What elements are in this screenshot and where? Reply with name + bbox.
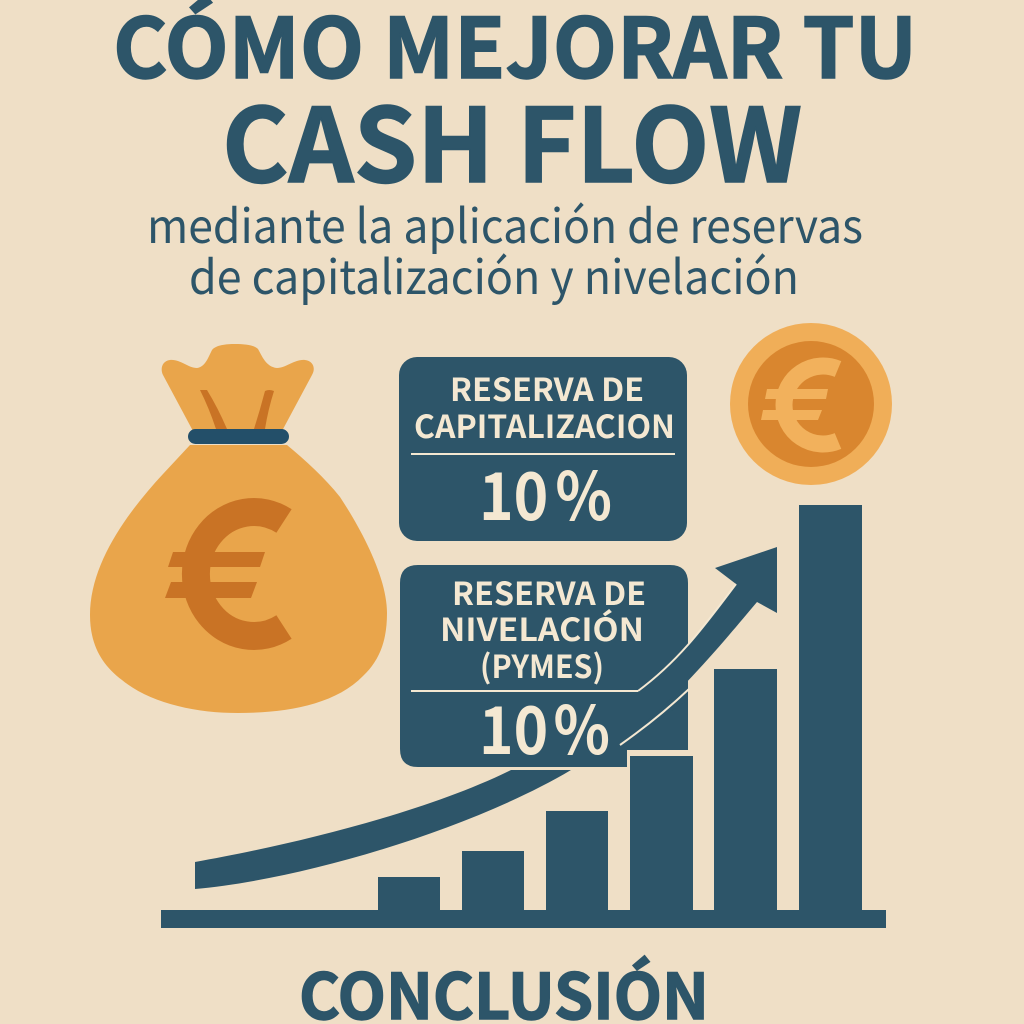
panel: reserva de capitalización: 10% (479, 444, 612, 540)
subtitle (147, 188, 863, 308)
panel: reserva de capitalización: RESERVA DE (450, 365, 644, 411)
subtitle: mediante la aplicación de reservas (147, 188, 863, 257)
subtitle: de capitalización y nivelación (189, 239, 799, 308)
panel: reserva de capitalización (399, 357, 687, 541)
panel: reserva de nivelación: NIVELACIÓN (440, 605, 644, 651)
panel: reserva de capitalización: CAPITALIZACION (414, 402, 675, 448)
title: CASH FLOW (222, 65, 802, 212)
arrow (195, 547, 777, 889)
panel: reserva de nivelación: (PYMES) (480, 642, 604, 688)
bar chart (161, 505, 886, 928)
panel: reserva de nivelación (400, 565, 688, 774)
panel: reserva de nivelación: RESERVA DE (452, 569, 646, 615)
panel: reserva de nivelación: 10% (479, 678, 610, 774)
title (113, 0, 917, 212)
icon: money bag (90, 344, 387, 713)
icon: euro coin (730, 323, 892, 485)
